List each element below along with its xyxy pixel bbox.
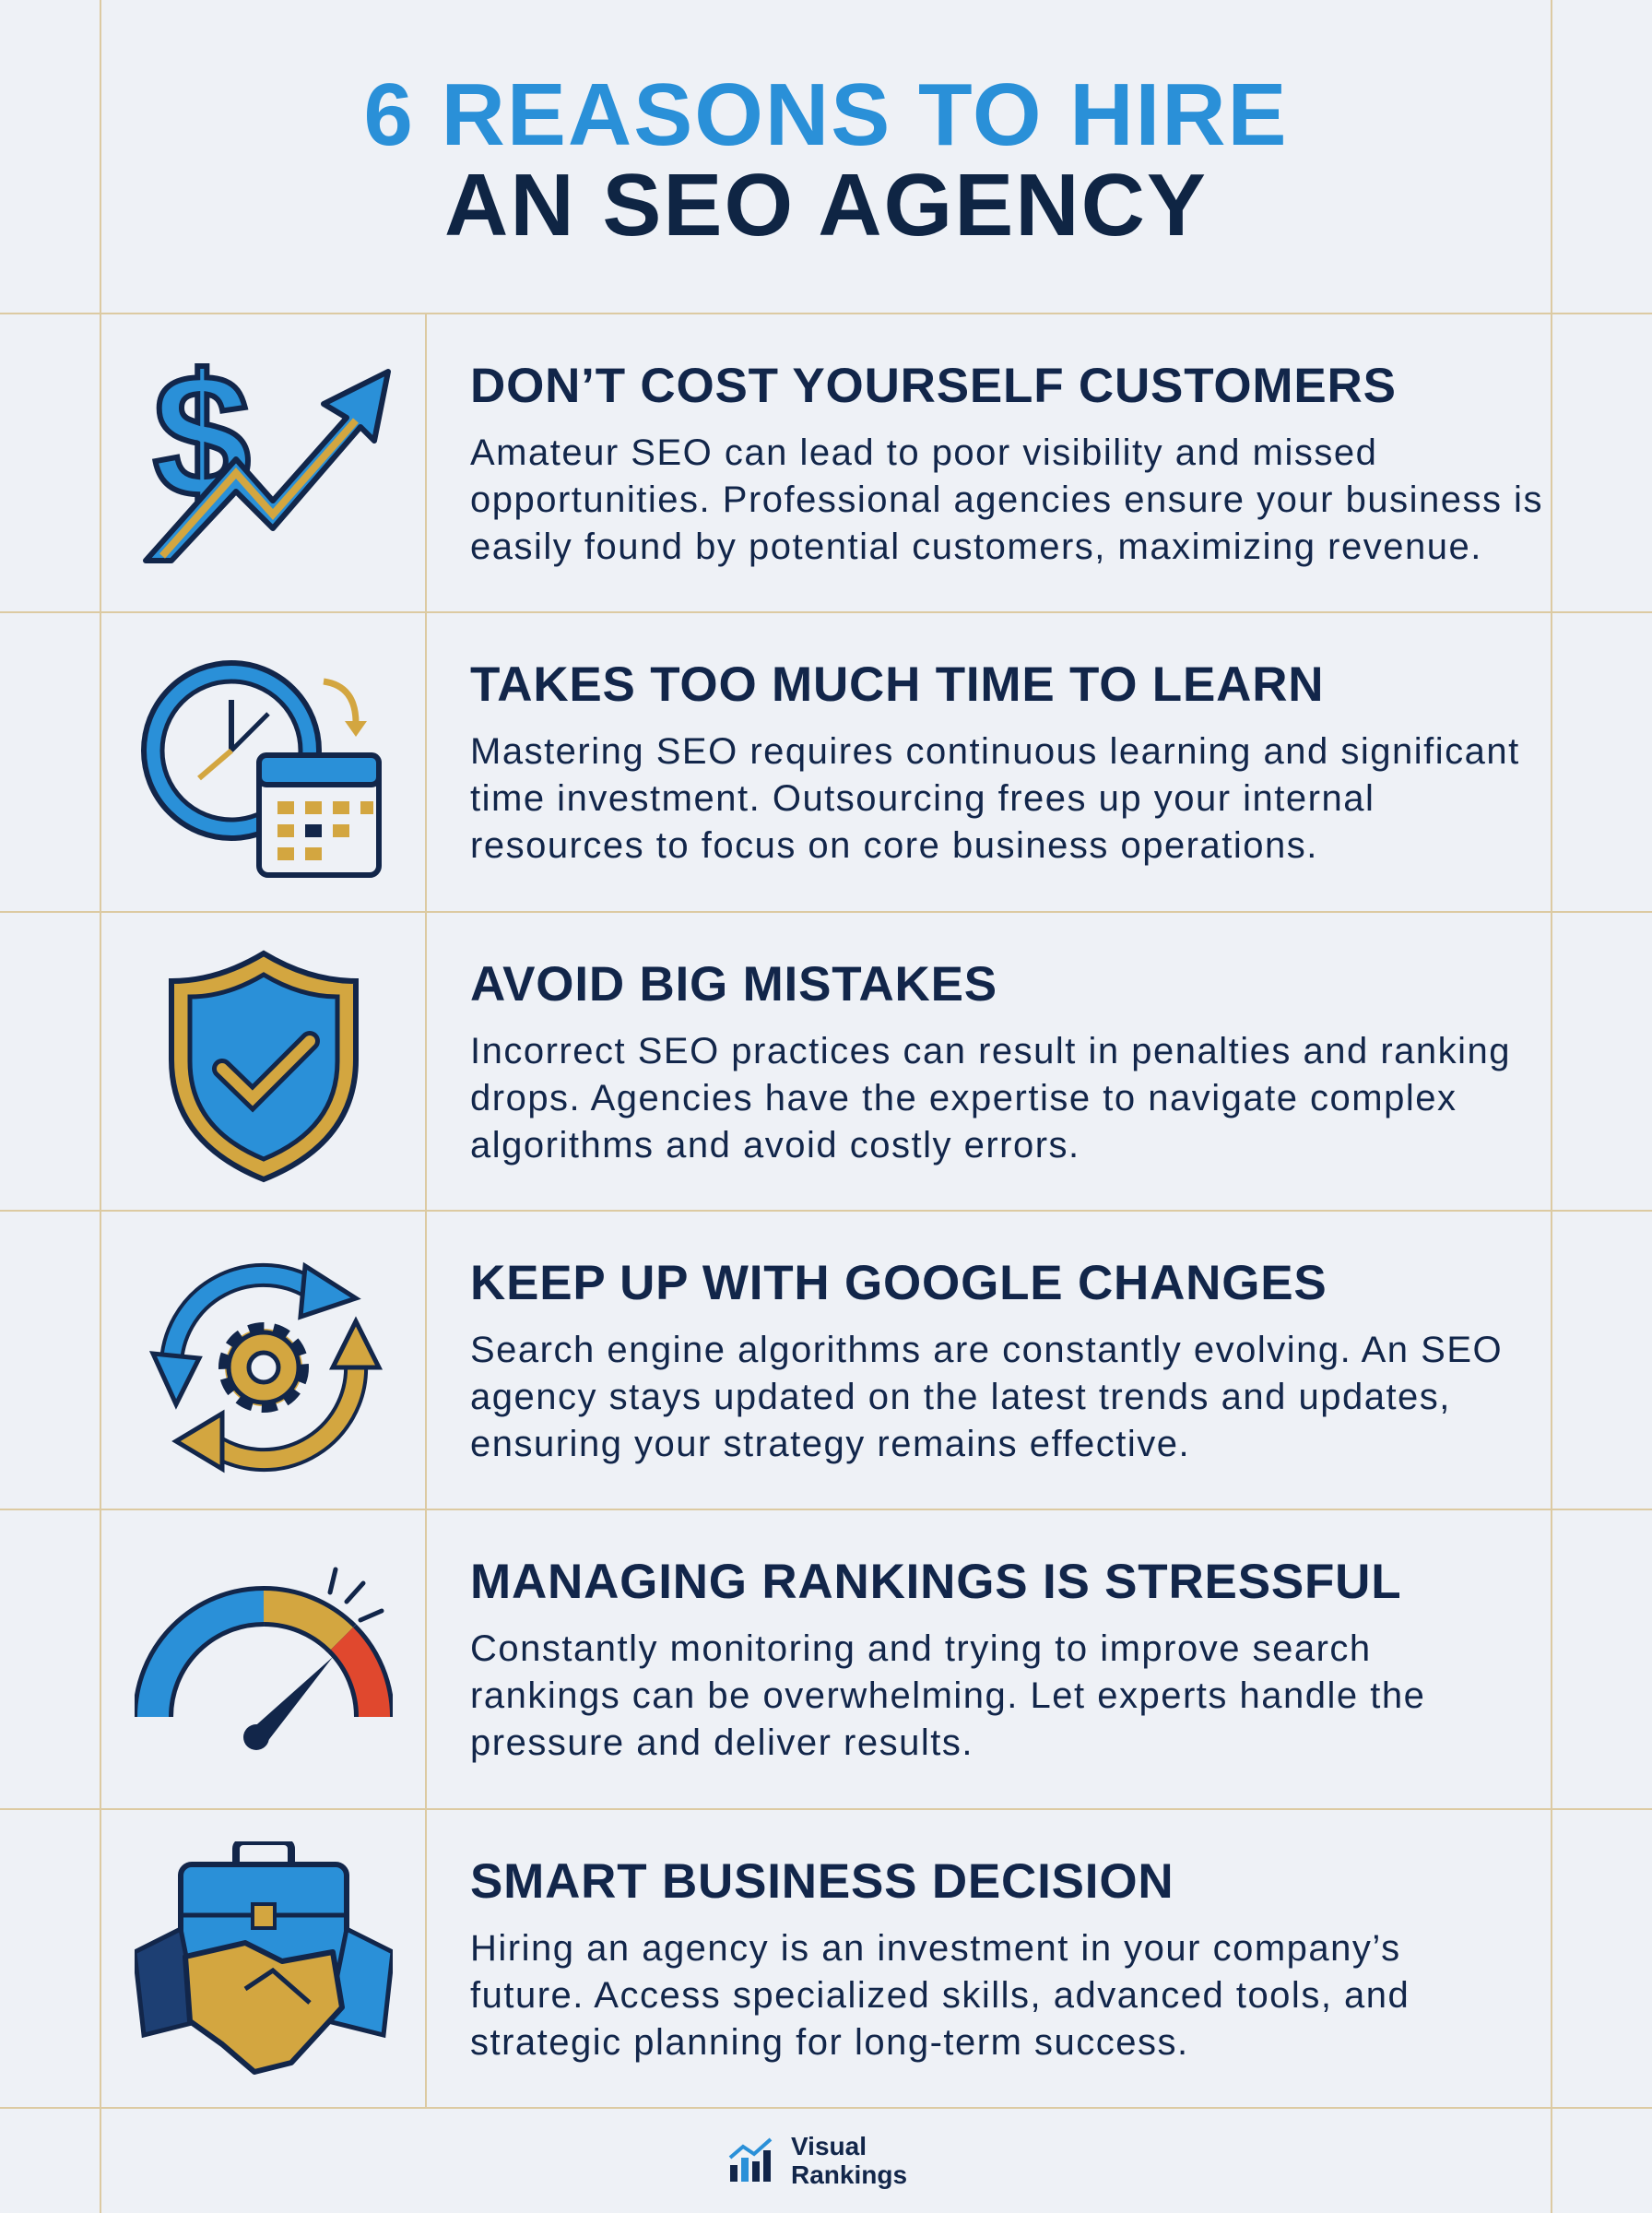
icon: bar chart logo: [728, 2137, 773, 2182]
text: [470, 432, 1543, 567]
text: ensuring your strategy remains effective.: [470, 1424, 1190, 1464]
text: Search engine algorithms are constantly evolving. An SEO: [470, 1330, 1503, 1370]
text: drops. Agencies have the expertise to navigate complex: [470, 1078, 1457, 1118]
panel: google: [149, 1256, 1503, 1473]
heading: KEEP UP WITH GOOGLE CHANGES: [470, 1256, 1328, 1310]
icon: shield check: [169, 950, 359, 1182]
text: time investment. Outsourcing frees up your internal: [470, 778, 1375, 819]
panel: business: [135, 1841, 1410, 2075]
text: easily found by potential customers, maximizing revenue.: [470, 527, 1482, 567]
text: pressure and deliver results.: [470, 1722, 974, 1763]
heading: DON’T COST YOURSELF CUSTOMERS: [470, 359, 1397, 413]
icon: gauge: [135, 1568, 393, 1750]
text: rankings can be overwhelming. Let experts handle the: [470, 1675, 1425, 1716]
text: [470, 1928, 1410, 2063]
panel: rankings: [135, 1555, 1425, 1763]
text: strategic planning for long-term success.: [470, 2022, 1189, 2063]
icon: gear cycle: [149, 1261, 383, 1473]
text: future. Access specialized skills, advanced tools, and: [470, 1975, 1410, 2016]
title: 6 REASONS TO HIRE: [363, 65, 1289, 164]
text: Constantly monitoring and trying to improve search: [470, 1628, 1372, 1669]
text: Mastering SEO requires continuous learning and significant: [470, 731, 1520, 772]
text: [470, 731, 1520, 866]
text: Amateur SEO can lead to poor visibility and missed: [470, 432, 1377, 473]
text: [470, 1330, 1503, 1464]
text: Hiring an agency is an investment in your company’s: [470, 1928, 1401, 1969]
heading: SMART BUSINESS DECISION: [470, 1854, 1174, 1909]
text: Incorrect SEO practices can result in penalties and ranking: [470, 1031, 1511, 1071]
text: agency stays updated on the latest trends and updates,: [470, 1377, 1451, 1417]
heading: AVOID BIG MISTAKES: [470, 957, 997, 1012]
footer logo: Rankings: [791, 2160, 907, 2189]
text: resources to focus on core business operations.: [470, 825, 1318, 866]
heading: MANAGING RANKINGS IS STRESSFUL: [470, 1555, 1401, 1609]
text: algorithms and avoid costly errors.: [470, 1125, 1080, 1166]
title: [363, 65, 1289, 254]
text: opportunities. Professional agencies ensure your business is: [470, 479, 1543, 520]
title: AN SEO AGENCY: [444, 156, 1208, 254]
panel: time: [141, 657, 1520, 878]
icon: dollar arrow: [143, 339, 391, 563]
footer logo: [728, 2132, 907, 2189]
icon: briefcase handshake: [135, 1841, 393, 2075]
text: [470, 1031, 1511, 1166]
heading: TAKES TOO MUCH TIME TO LEARN: [470, 657, 1324, 712]
icon: clock calendar: [141, 660, 382, 878]
footer logo: Visual: [791, 2132, 867, 2160]
icon: dollar arrow: $: [153, 339, 251, 534]
panel: mistakes: [169, 950, 1511, 1182]
panel: customers: [143, 339, 1543, 567]
text: [470, 1628, 1425, 1763]
